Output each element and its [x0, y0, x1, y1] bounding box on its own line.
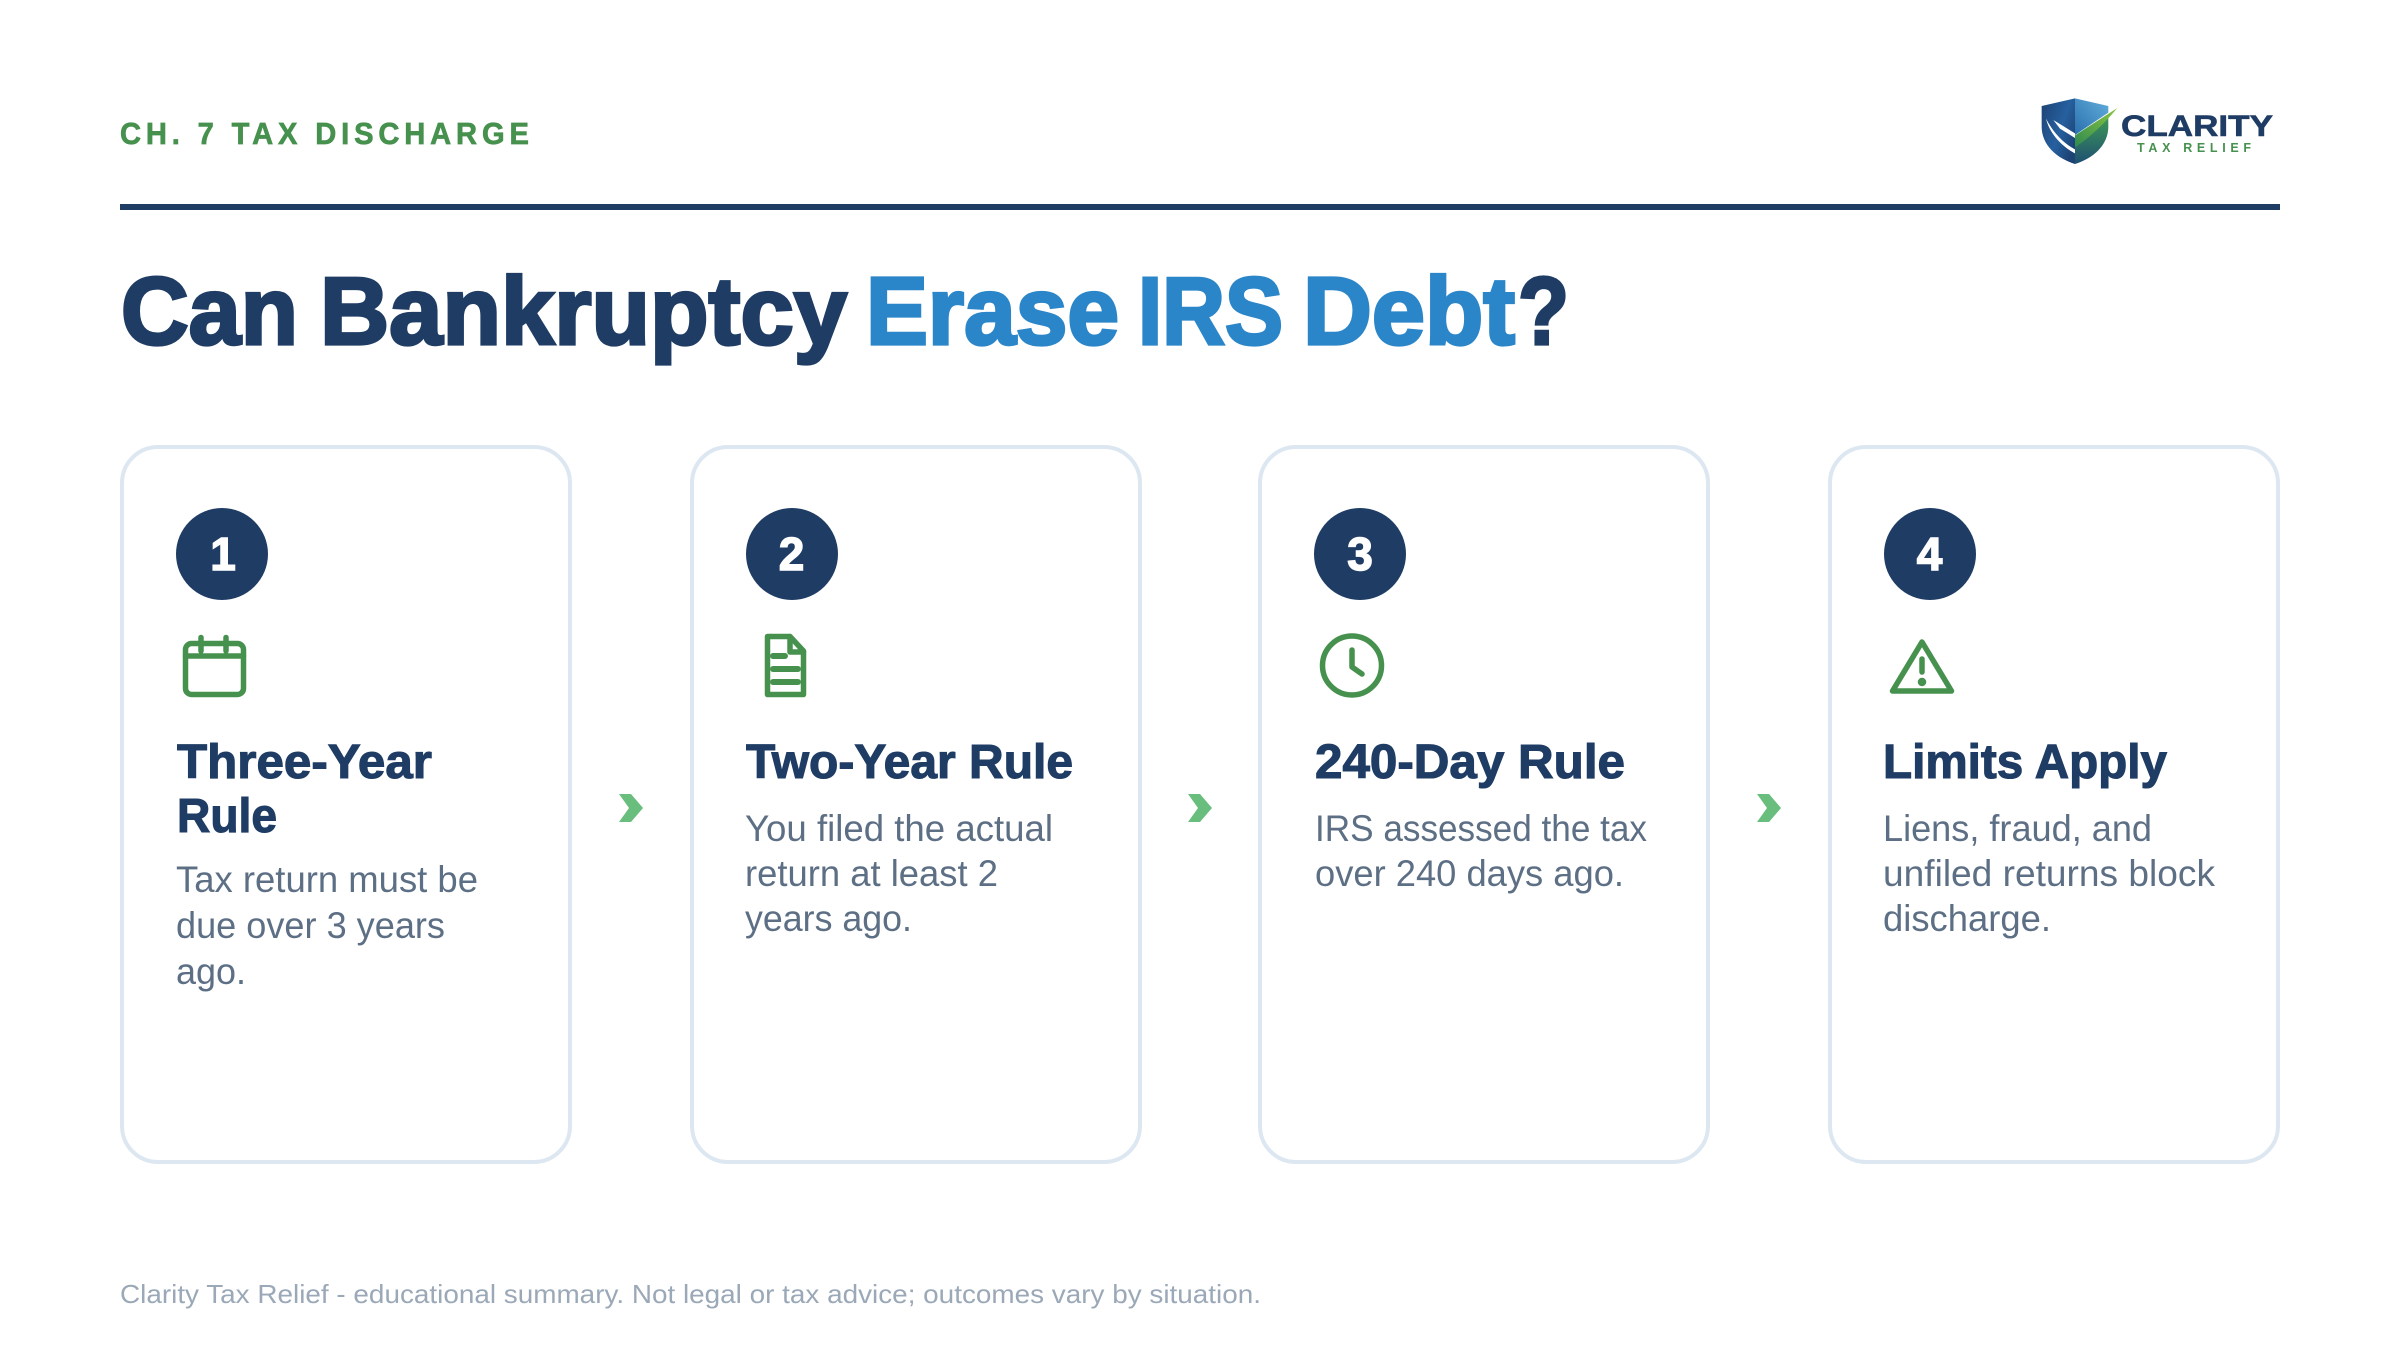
- body text: discharge.: [1883, 898, 2051, 939]
- body text: ago.: [176, 951, 246, 992]
- step number 1: 1: [210, 528, 236, 580]
- panel: step 3 240-day rule: [1260, 447, 1708, 1162]
- title: Can: [121, 258, 298, 365]
- icon: document: [768, 636, 804, 694]
- body text: Liens, fraud, and: [1883, 808, 2152, 849]
- step number 2: [746, 508, 838, 600]
- title: Erase: [866, 258, 1119, 365]
- step number 4: 4: [1917, 528, 1943, 580]
- body text: over 240 days ago.: [1315, 853, 1624, 894]
- body text: Tax return must be: [176, 859, 478, 900]
- body text: years ago.: [745, 898, 912, 939]
- panel: step 1 three-year rule: [122, 447, 570, 1162]
- body text: due over 3 years: [176, 905, 445, 946]
- body text: IRS assessed the tax: [1315, 808, 1647, 849]
- icon: calendar: [186, 638, 244, 694]
- title: Debt: [1303, 258, 1515, 365]
- arrow: [619, 794, 643, 822]
- heading: two-year rule: Two-Year Rule: [746, 736, 1073, 789]
- logo: Clarity Tax Relief: [2042, 98, 2273, 164]
- heading: 240-day rule: 240-Day Rule: [1315, 736, 1625, 789]
- body text: unfiled returns block: [1883, 853, 2215, 894]
- title: IRS: [1138, 258, 1283, 365]
- arrow: [1757, 794, 1781, 822]
- body text: return at least 2: [745, 853, 998, 894]
- heading: limits apply: Limits Apply: [1883, 736, 2167, 789]
- title: Bankruptcy: [320, 258, 847, 365]
- panel: step 2 two-year rule: [692, 447, 1140, 1162]
- step number 3: 3: [1347, 528, 1373, 580]
- icon: warning triangle: [1892, 642, 1952, 691]
- body text: You filed the actual: [745, 808, 1053, 849]
- heading: three-year rule: Three-Year: [177, 736, 432, 789]
- footer disclaimer: Clarity Tax Relief - educational summary. Not legal or tax advice; outcomes vary by situation.: [120, 1279, 1261, 1309]
- title: ?: [1518, 258, 1569, 365]
- logo tagline: TAX RELIEF: [2137, 141, 2251, 155]
- eyebrow label: CH. 7 TAX DISCHARGE: [120, 117, 529, 151]
- heading: three-year rule: Rule: [177, 790, 277, 843]
- step number 1: [176, 508, 268, 600]
- arrow: [1188, 794, 1212, 822]
- step number 2: 2: [779, 528, 804, 580]
- logo wordmark: CLARITY: [2121, 110, 2273, 143]
- panel: step 4 limits apply: [1830, 447, 2278, 1162]
- step number 3: [1314, 508, 1406, 600]
- icon: shield with check: [2042, 98, 2117, 164]
- step number 4: [1884, 508, 1976, 600]
- header rule: [120, 204, 2280, 210]
- icon: clock: [1322, 636, 1382, 695]
